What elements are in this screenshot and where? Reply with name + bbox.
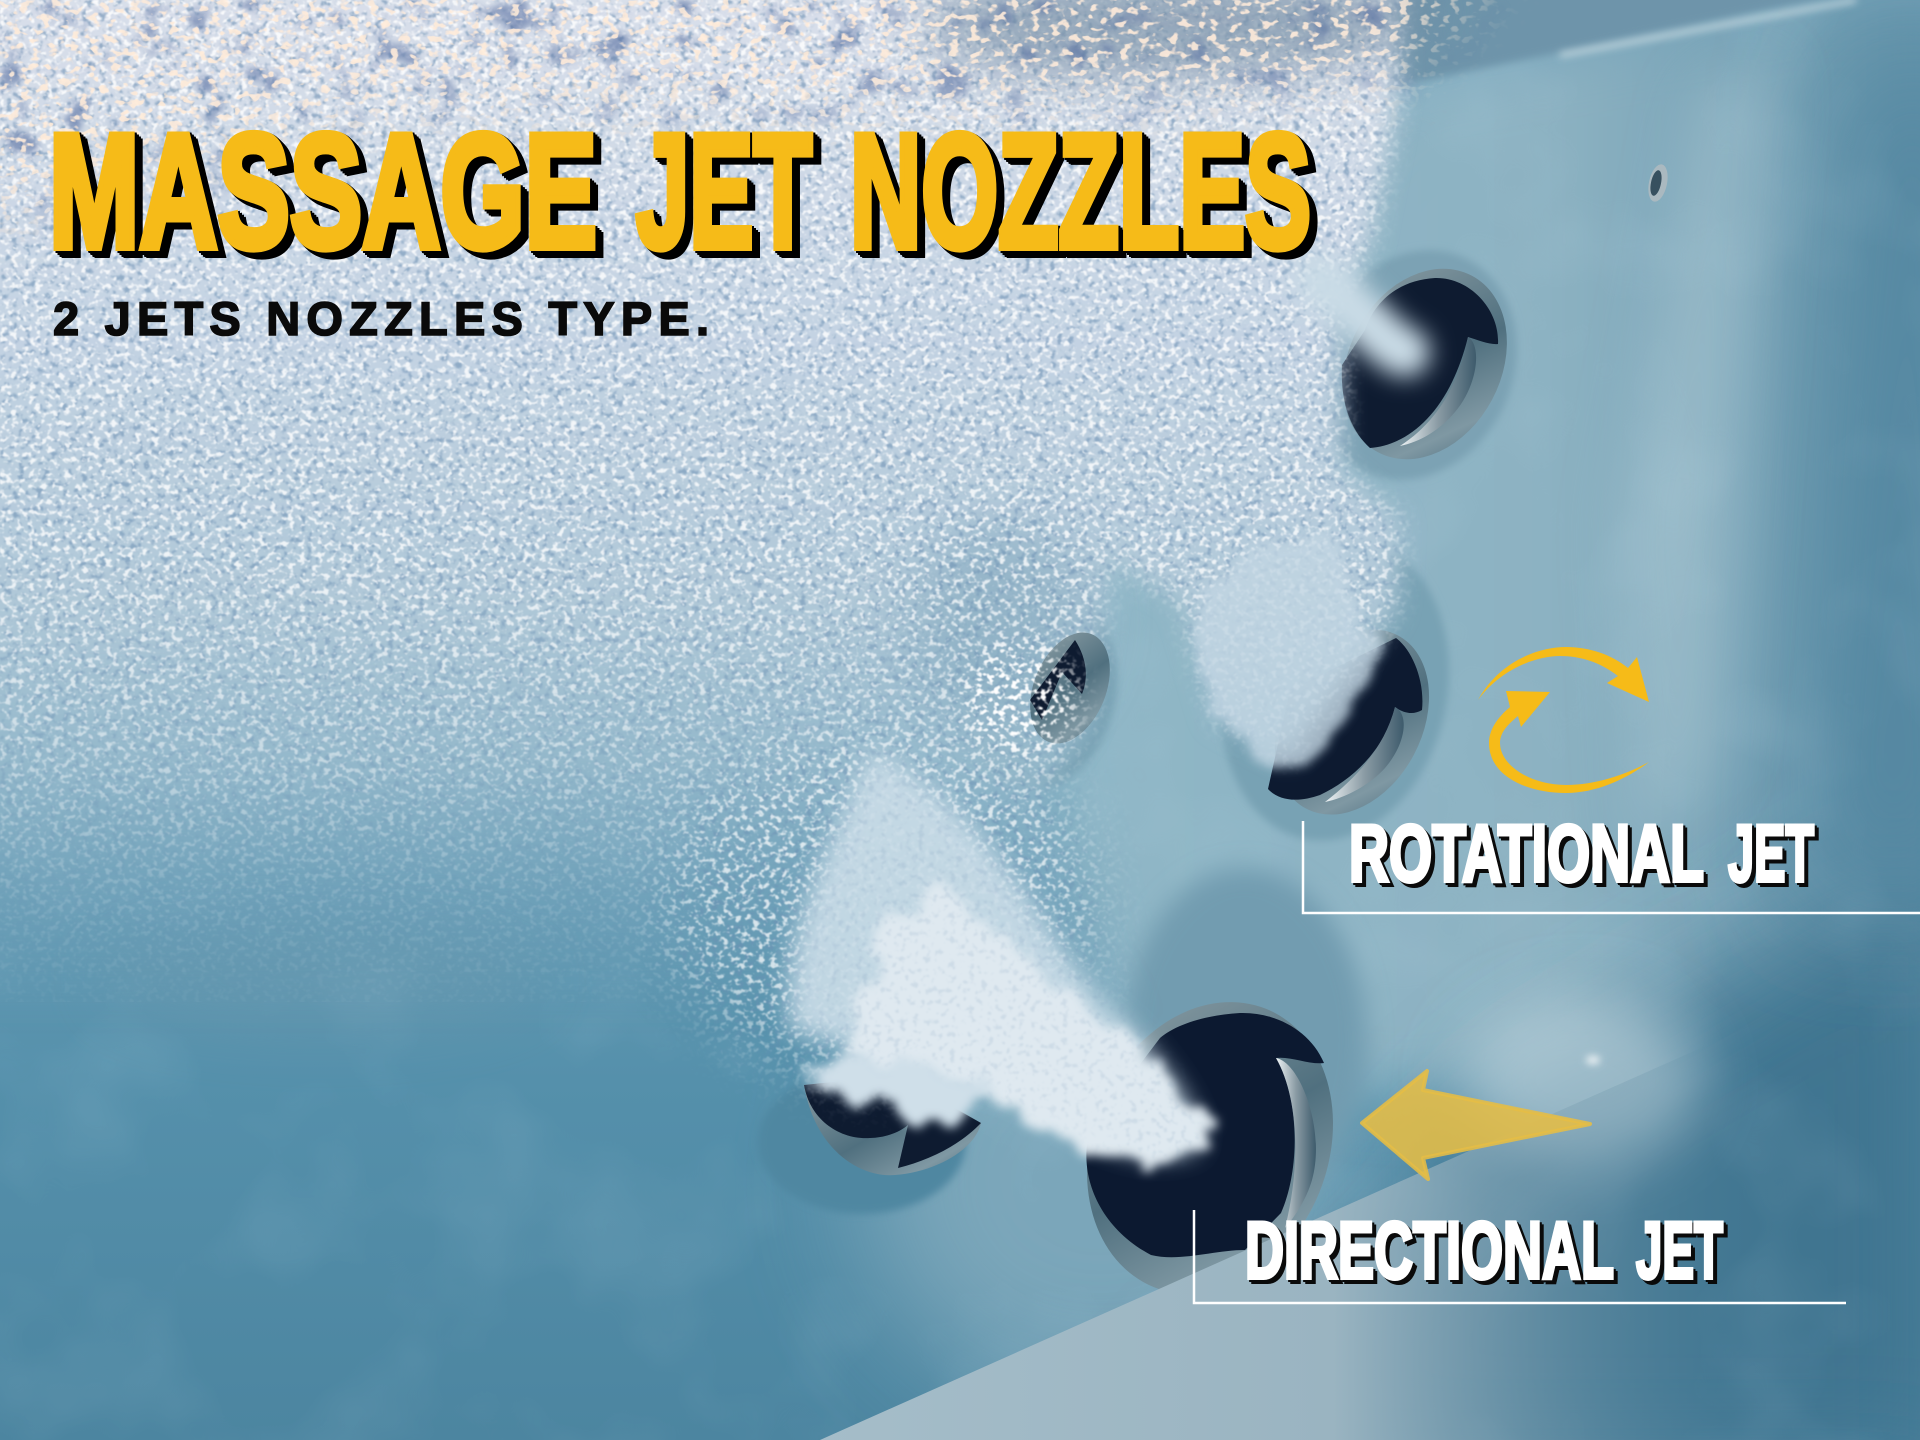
top water surface wedge	[1140, 0, 1860, 110]
label: directional jet: DIRECTIONAL	[1245, 1206, 1613, 1296]
glow on ledge	[1460, 995, 1700, 1165]
title: MASSAGE	[49, 101, 597, 282]
dark band in lower foam	[100, 930, 540, 1030]
right tub wall	[1040, 0, 1920, 1100]
dark opening	[1030, 640, 1086, 720]
plume: directional jet, core	[840, 880, 1206, 1159]
shaded patch around centre nozzle	[910, 520, 1090, 720]
chrome nose	[1400, 337, 1476, 446]
plume: middle right stream	[1190, 540, 1375, 775]
dish: large lower	[1123, 868, 1367, 1212]
plume: directional jet, soft	[789, 750, 1199, 1157]
nozzle dishes	[758, 217, 1554, 1214]
lower curved arrow	[1489, 691, 1649, 793]
title: JET	[636, 101, 812, 282]
dark opening	[804, 1075, 981, 1168]
bubble texture light	[0, 0, 1413, 1114]
dark opening	[1342, 278, 1498, 448]
dark opening	[1086, 1013, 1324, 1257]
chrome nose highlight	[1276, 1058, 1316, 1228]
dish: small lower	[758, 1070, 966, 1214]
icon: rotation arrows	[1478, 647, 1649, 793]
darker surface toward right	[920, 0, 1440, 90]
plume: top nozzle stream	[1320, 280, 1405, 352]
dish: top	[1276, 217, 1554, 513]
subtitle: 2 JETS NOZZLES TYPE.	[53, 292, 709, 345]
callout frame: directional jet	[1194, 1210, 1846, 1303]
jet nozzle: middle right	[1244, 603, 1460, 841]
lower right dark water	[1150, 840, 1920, 1440]
glint	[1586, 1056, 1600, 1064]
chrome ring	[1044, 965, 1376, 1331]
dark opening	[1268, 638, 1422, 800]
chrome ring	[1244, 603, 1460, 841]
plume: small lower spray	[805, 1058, 995, 1125]
chrome nose	[1325, 707, 1404, 802]
chrome body	[804, 1075, 981, 1175]
bubble clump	[951, 632, 1096, 770]
right edge shade	[1800, 60, 1920, 900]
jet nozzle: middle center	[951, 632, 1110, 770]
jet nozzle: top right	[1311, 240, 1539, 488]
warm highlights	[0, 0, 1920, 300]
bubble texture dark	[0, 0, 1404, 910]
wall fitting	[1645, 163, 1671, 203]
dish: middle right	[1194, 518, 1476, 862]
chrome ring	[1311, 240, 1539, 488]
tub ledge	[820, 1000, 1920, 1440]
dish: middle center	[945, 576, 1135, 804]
chrome ring	[1015, 621, 1125, 755]
foam base tone	[0, 0, 1400, 1150]
foam field	[0, 0, 1416, 1114]
jet nozzle: large lower (directional)	[1044, 965, 1376, 1331]
small fitting	[1645, 163, 1671, 203]
bright wall edge line	[1560, 0, 1856, 55]
blue blotches	[0, 0, 1920, 300]
upper curved arrow	[1478, 647, 1649, 702]
label: rotational jet: JET	[1728, 809, 1814, 899]
label: directional jet: JET	[1636, 1206, 1723, 1296]
soft light on lower wall	[860, 960, 1340, 1400]
jet nozzle: small lower	[804, 1075, 981, 1175]
label: rotational jet: ROTATIONAL	[1349, 809, 1703, 899]
vertical light streak	[1620, 60, 1770, 860]
callout frame: rotational jet	[1303, 821, 1920, 913]
title: NOZZLES	[850, 101, 1311, 282]
icon: directional arrow	[1362, 1071, 1590, 1179]
fitting centre	[1648, 169, 1664, 197]
water surface sparkle	[0, 0, 1499, 239]
